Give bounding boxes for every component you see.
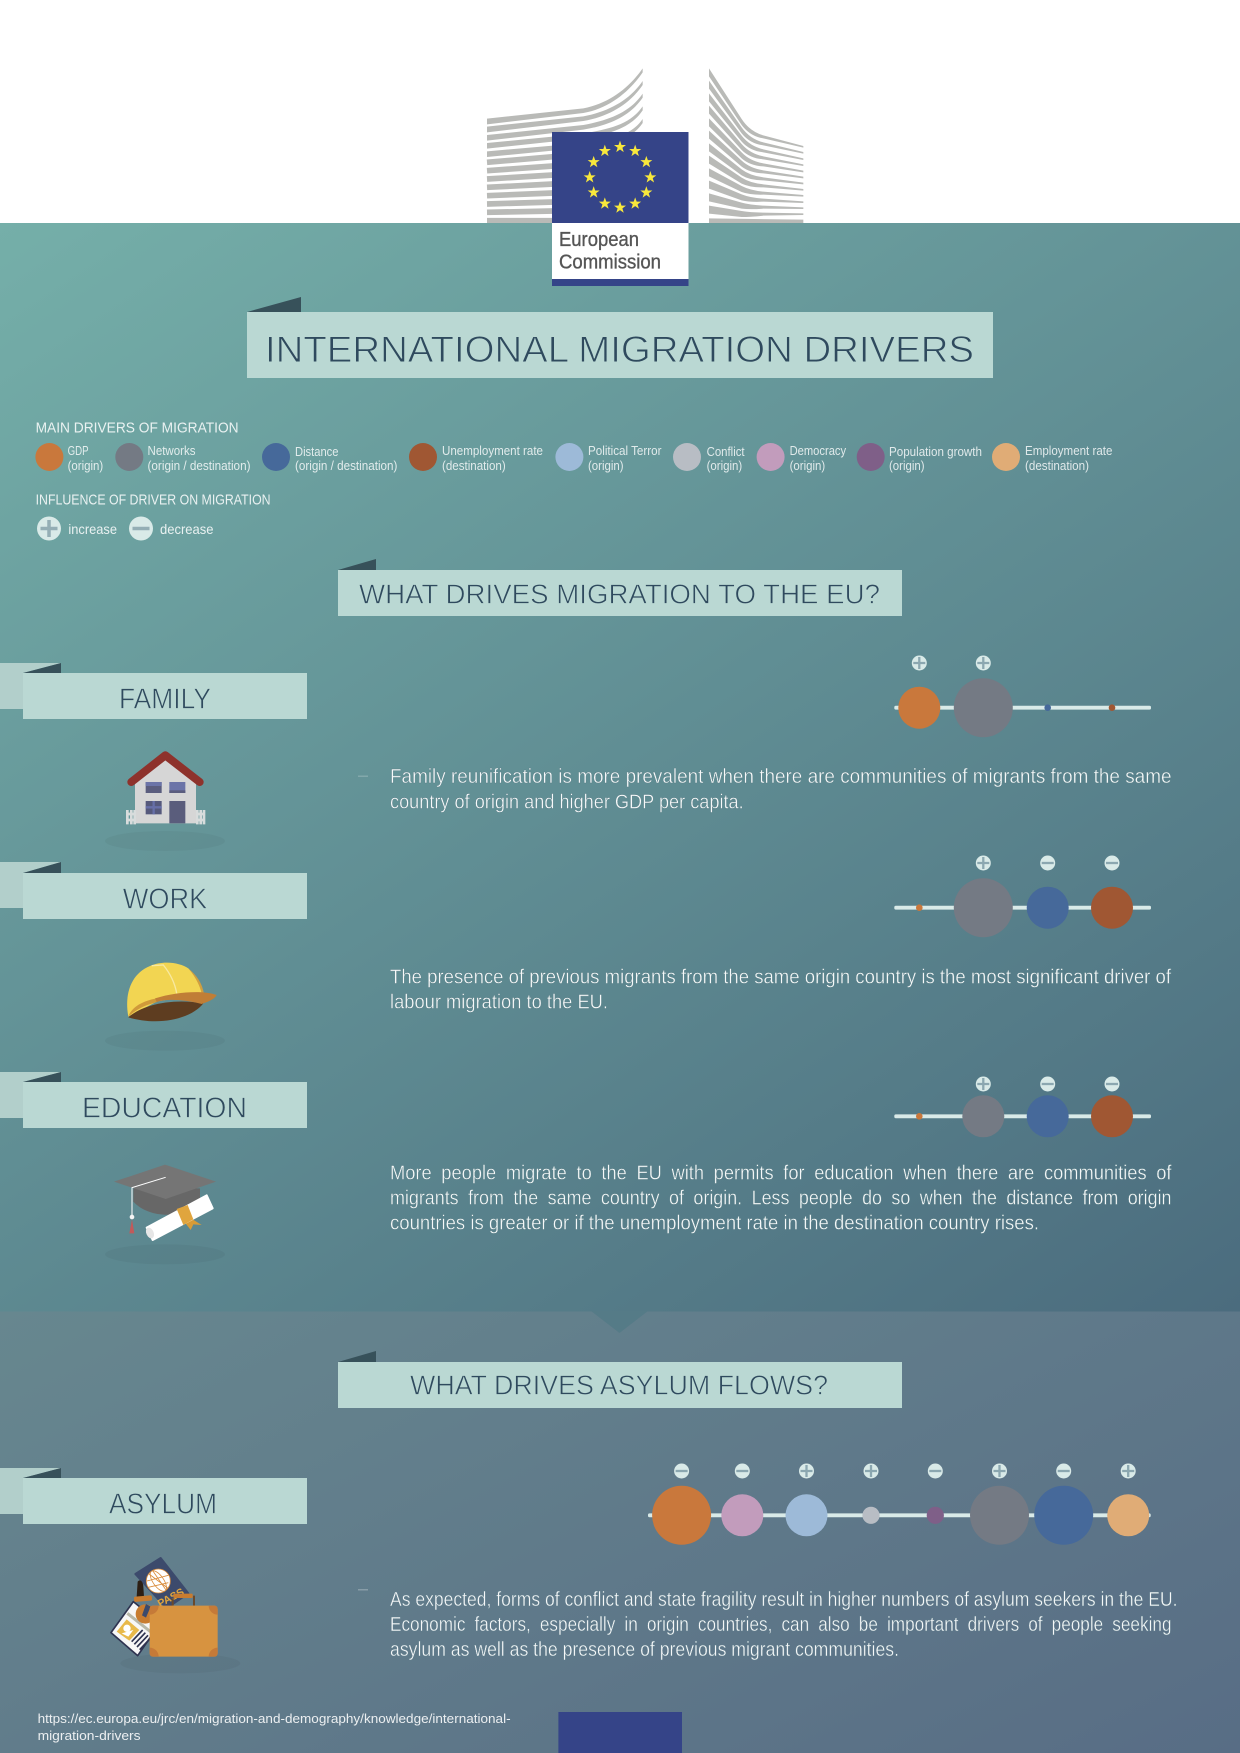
panel: work: WORK <box>123 884 207 916</box>
legend: main drivers of migration: (destination) <box>1025 459 1089 473</box>
panel: asylum: ASYLUM <box>109 1488 217 1520</box>
legend: main drivers of migration: (origin) <box>889 459 925 473</box>
heading: what drives migration to the EU <box>338 559 902 616</box>
legend: main drivers of migration: MAIN DRIVERS OF MIGRATION <box>36 420 239 437</box>
legend: main drivers of migration: (origin) <box>790 459 825 473</box>
chart: education drivers <box>894 1076 1151 1137</box>
legend: influence of driver on migration: increase <box>68 521 117 537</box>
logo: European Commission <box>552 132 688 286</box>
source link text <box>38 1711 511 1743</box>
logo: European Commission: European <box>559 229 639 251</box>
footer blue block <box>558 1712 682 1753</box>
legend: main drivers of migration: Unemployment rate <box>442 444 543 458</box>
icon: house <box>105 755 225 851</box>
chart: work drivers <box>894 856 1151 937</box>
legend: influence of driver on migration: decrease <box>160 521 214 537</box>
text: family <box>358 766 1172 813</box>
text: education <box>390 1162 1172 1234</box>
chart: asylum drivers <box>648 1464 1151 1545</box>
text: work: labour migration to the EU. <box>390 991 608 1013</box>
legend: main drivers of migration: (origin / destination) <box>295 459 397 473</box>
legend: main drivers of migration: Employment rate <box>1025 444 1112 458</box>
legend: main drivers of migration: Conflict <box>707 445 745 459</box>
chart: family drivers <box>894 656 1151 737</box>
panel: family <box>0 656 1172 851</box>
icon: passport and suitcase: PASS <box>156 1586 186 1610</box>
legend: main drivers of migration: Networks <box>148 444 196 458</box>
source link text: migration-drivers <box>38 1728 141 1743</box>
legend: main drivers of migration <box>35 420 1112 473</box>
legend: main drivers of migration: Democracy <box>790 444 847 458</box>
icon: Berlaymont building logo <box>487 68 803 224</box>
panel: asylum <box>0 1464 1178 1673</box>
text: work: The presence of previous migrants from the same origin country is the most significant driver of <box>390 966 1171 988</box>
legend: main drivers of migration: (origin) <box>707 459 742 473</box>
icon: hard hat <box>105 963 225 1051</box>
legend: main drivers of migration: Distance <box>295 445 339 459</box>
legend: main drivers of migration: (origin) <box>68 459 103 473</box>
text: asylum <box>358 1589 1178 1661</box>
legend: influence of driver on migration <box>36 491 271 540</box>
legend: main drivers of migration: (destination) <box>442 459 506 473</box>
legend: main drivers of migration: Population growth <box>889 445 982 459</box>
icon: graduation cap and diploma <box>105 1165 225 1264</box>
text: family: country of origin and higher GDP per capita. <box>390 791 744 813</box>
text: work <box>390 966 1171 1013</box>
panel: education: EDUCATION <box>82 1092 247 1124</box>
text: asylum: asylum as well as the presence of previous migrant communities. <box>390 1639 899 1661</box>
text: family: Family reunification is more prevalent when there are communities of migrants from the same <box>390 766 1172 788</box>
source link text: https://ec.europa.eu/jrc/en/migration-and-demography/knowledge/international- <box>38 1711 511 1726</box>
legend: main drivers of migration: (origin / destination) <box>148 459 250 473</box>
text: education: countries is greater or if the unemployment rate in the destination country rises. <box>390 1212 1039 1234</box>
heading: what drives asylum flows: WHAT DRIVES ASYLUM FLOWS? <box>410 1370 828 1400</box>
background: upper section gradient <box>0 223 1240 1312</box>
legend: main drivers of migration: Political Terror <box>588 444 662 458</box>
heading: what drives migration to the EU: WHAT DRIVES MIGRATION TO THE EU? <box>359 578 880 610</box>
title banner: INTERNATIONAL MIGRATION DRIVERS <box>265 329 974 370</box>
text: education: migrants from the same country of origin. Less people do so when the distance from origin <box>390 1187 1172 1209</box>
arrow: notch between sections <box>591 1311 648 1333</box>
title banner <box>247 297 993 378</box>
legend: influence of driver on migration: INFLUENCE OF DRIVER ON MIGRATION <box>36 491 271 508</box>
background: lower section gradient <box>0 1312 1240 1753</box>
legend: main drivers of migration: (origin) <box>588 459 624 473</box>
legend: main drivers of migration: GDP <box>68 444 89 458</box>
panel: work <box>0 856 1171 1051</box>
panel: education <box>0 1072 1172 1264</box>
panel: family: FAMILY <box>119 684 211 716</box>
text: education: More people migrate to the EU with permits for education when there are communities of <box>390 1162 1172 1184</box>
logo: European Commission: Commission <box>559 252 661 274</box>
heading: what drives asylum flows <box>338 1351 902 1408</box>
icon: passport and suitcase <box>111 1558 240 1673</box>
